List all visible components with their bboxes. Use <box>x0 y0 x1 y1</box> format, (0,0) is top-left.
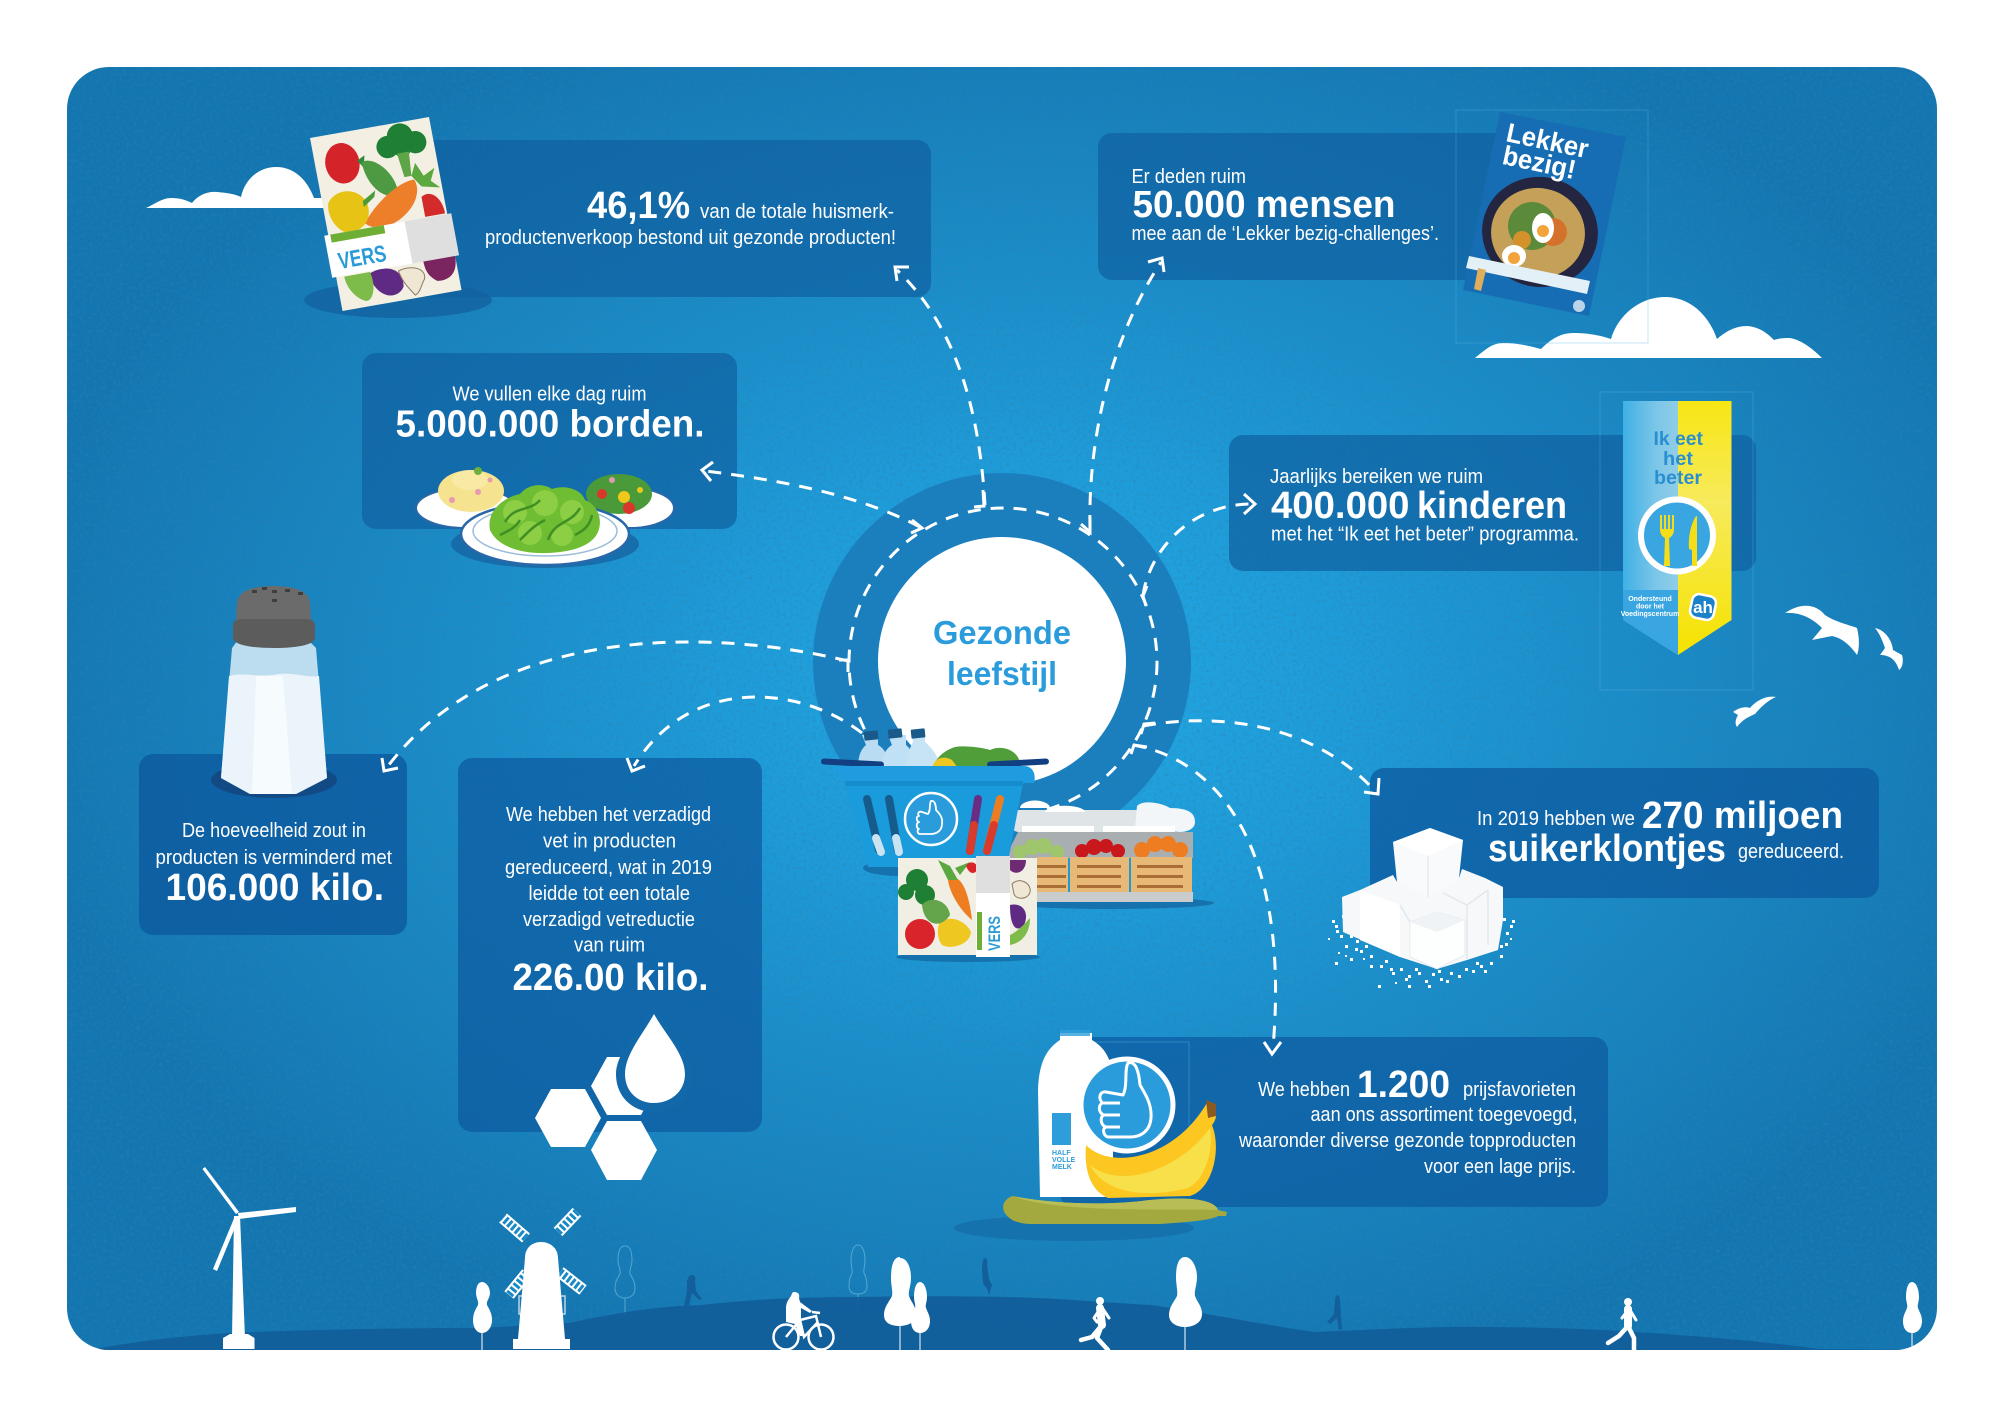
faint runner <box>684 1275 702 1306</box>
stat text: producten is verminderd met <box>156 847 392 869</box>
stat text: We vullen elke dag ruim <box>452 384 646 406</box>
icon: plates with food <box>416 467 674 568</box>
shadow under card <box>304 282 492 318</box>
shadow under shaker <box>211 762 337 798</box>
stat text: suikerklontjes <box>1488 828 1726 870</box>
stat text: Er deden ruim <box>1132 166 1246 188</box>
icon: vegetables card <box>306 116 465 312</box>
arrow to 46,1% <box>895 267 985 505</box>
icon: milk, bananas, cucumber: HALF <box>1052 1150 1071 1157</box>
landscape: hills, trees, windmills, cyclists, runners <box>67 1167 1937 1350</box>
body text: gereduceerd, wat in 2019 <box>505 857 712 879</box>
stat text: De hoeveelheid zout in <box>182 820 366 842</box>
icon: fat hexagons and drop <box>535 1006 693 1180</box>
stat text <box>396 384 704 446</box>
trees <box>473 1257 1922 1350</box>
booklet title: Lekker <box>1504 118 1592 164</box>
thin frame <box>1456 110 1648 343</box>
bird one <box>1785 606 1859 655</box>
icon: salt shaker <box>221 586 327 794</box>
stat text: 1.200 <box>1357 1064 1450 1106</box>
icon: Lekker bezig booklet <box>1463 112 1626 316</box>
stat text <box>1270 466 1579 546</box>
stat text <box>485 185 896 249</box>
arrow to 5.000.000 <box>702 462 920 527</box>
hills <box>67 1296 1937 1350</box>
junction marks on ring <box>839 490 1155 754</box>
stat text <box>1132 166 1439 245</box>
faint background figures <box>615 1245 867 1318</box>
stat text: prijsfavorieten <box>1463 1079 1576 1101</box>
windmill <box>503 1212 583 1349</box>
stat text <box>1477 795 1844 870</box>
stat text: productenverkoop bestond uit gezonde producten! <box>485 227 896 249</box>
stat text: aan ons assortiment toegevoegd, <box>1310 1104 1578 1126</box>
basket badge <box>905 793 957 845</box>
arrow to 50.000 <box>1090 258 1164 528</box>
panel: 50.000 mensen <box>1098 110 1648 343</box>
booklet title: bezig! <box>1500 140 1579 185</box>
stat text: gereduceerd. <box>1738 841 1844 863</box>
dashed circle <box>849 508 1157 816</box>
stat text: 50.000 mensen <box>1132 184 1396 226</box>
arrow to zout <box>382 642 848 771</box>
arrow to suiker <box>1143 721 1379 794</box>
body text: 226.00 kilo. <box>512 957 708 999</box>
stat text: 46,1% <box>587 185 690 227</box>
thin frame <box>1600 392 1753 690</box>
body text: vet in producten <box>543 830 676 852</box>
stat text: waaronder diverse gezonde topproducten <box>1238 1130 1576 1152</box>
icon: Ik eet het beter ribbon: door het <box>1636 604 1665 610</box>
stat text: 270 miljoen <box>1642 795 1843 837</box>
thumb badge <box>1081 1059 1173 1151</box>
stat text: 106.000 kilo. <box>166 867 384 909</box>
stat text: met het “Ik eet het beter” programma. <box>1271 524 1579 546</box>
panel: 46,1% gezonde producten <box>304 116 931 318</box>
thin frame <box>1060 1042 1189 1182</box>
panel: 5.000.000 borden <box>362 353 737 568</box>
icon: sugar cubes <box>1328 828 1515 988</box>
body text: van ruim <box>574 934 645 956</box>
clouds and birds <box>146 167 1903 727</box>
central ring <box>813 473 1191 851</box>
runner <box>1081 1297 1109 1350</box>
cloud right <box>1475 297 1822 358</box>
dashed connector arrows <box>382 258 1379 1054</box>
fork and knife <box>1660 515 1697 566</box>
panel: suikerklontjes <box>1328 768 1879 988</box>
bird three <box>1733 697 1776 727</box>
icon: Ik eet het beter ribbon: beter <box>1654 468 1703 489</box>
icon: vegetables card front: VERS <box>985 916 1004 951</box>
central circle: Gezonde leefstijl <box>878 537 1126 785</box>
body text <box>505 804 712 999</box>
stat text: 400.000 <box>1271 485 1410 527</box>
arrow to vet <box>627 697 862 771</box>
cyclist <box>774 1292 834 1350</box>
stat text: 5.000.000 borden. <box>396 404 704 446</box>
central circle: Gezonde leefstijl: leefstijl <box>947 655 1057 692</box>
arrow to prijsfavorieten <box>1133 745 1281 1054</box>
icon: Ik eet het beter ribbon: het <box>1663 449 1694 470</box>
body text: verzadigd vetreductie <box>523 909 695 931</box>
cloud left <box>146 167 330 208</box>
panel: zout <box>139 586 407 935</box>
stat text <box>156 820 392 909</box>
icon: milk, bananas, cucumber: MELK <box>1052 1164 1072 1171</box>
runner right <box>1608 1298 1636 1350</box>
icon: Ik eet het beter ribbon: Ik eet <box>1654 429 1704 450</box>
panel: prijsfavorieten <box>954 1030 1608 1241</box>
stat text: kinderen <box>1417 485 1567 527</box>
icon: vegetables card: VERS <box>336 240 388 274</box>
stat text: We hebben <box>1258 1079 1350 1101</box>
icon: Ik eet het beter ribbon <box>1621 401 1732 655</box>
panel: 400.000 kinderen <box>1229 392 1756 690</box>
stat text: van de totale huismerk- <box>700 201 894 223</box>
stat text: mee aan de ‘Lekker bezig-challenges’. <box>1132 223 1439 245</box>
icon: milk, bananas, cucumber: VOLLE <box>1052 1157 1076 1164</box>
stat text: In 2019 hebben we <box>1477 808 1635 830</box>
wind turbine <box>202 1167 296 1349</box>
stat text: Jaarlijks bereiken we ruim <box>1270 466 1483 488</box>
stat text <box>1238 1064 1578 1178</box>
basket slots <box>867 799 1000 852</box>
faint runner right <box>1327 1295 1342 1330</box>
icon: Ik eet het beter ribbon: ah <box>1693 598 1713 617</box>
bird two <box>1875 628 1903 670</box>
icon: shopping basket <box>821 728 1049 876</box>
booklet title <box>1499 118 1592 187</box>
icon: vegetables card front <box>896 856 1040 962</box>
stat text: voor een lage prijs. <box>1424 1156 1576 1178</box>
central circle: Gezonde leefstijl: Gezonde <box>933 614 1071 651</box>
icon: milk, bananas, cucumber <box>954 1030 1227 1241</box>
body text: leidde tot een totale <box>528 883 690 905</box>
panel: verzadigd vet <box>458 758 762 1180</box>
icon: Ik eet het beter ribbon: Voedingscentrum <box>1621 611 1679 618</box>
icon: market crates <box>1005 800 1214 909</box>
faint cyclist <box>982 1258 992 1295</box>
arrow to 400.000 <box>1143 494 1255 595</box>
icon: Ik eet het beter ribbon: Ondersteund <box>1628 596 1672 603</box>
body text: We hebben het verzadigd <box>506 804 711 826</box>
